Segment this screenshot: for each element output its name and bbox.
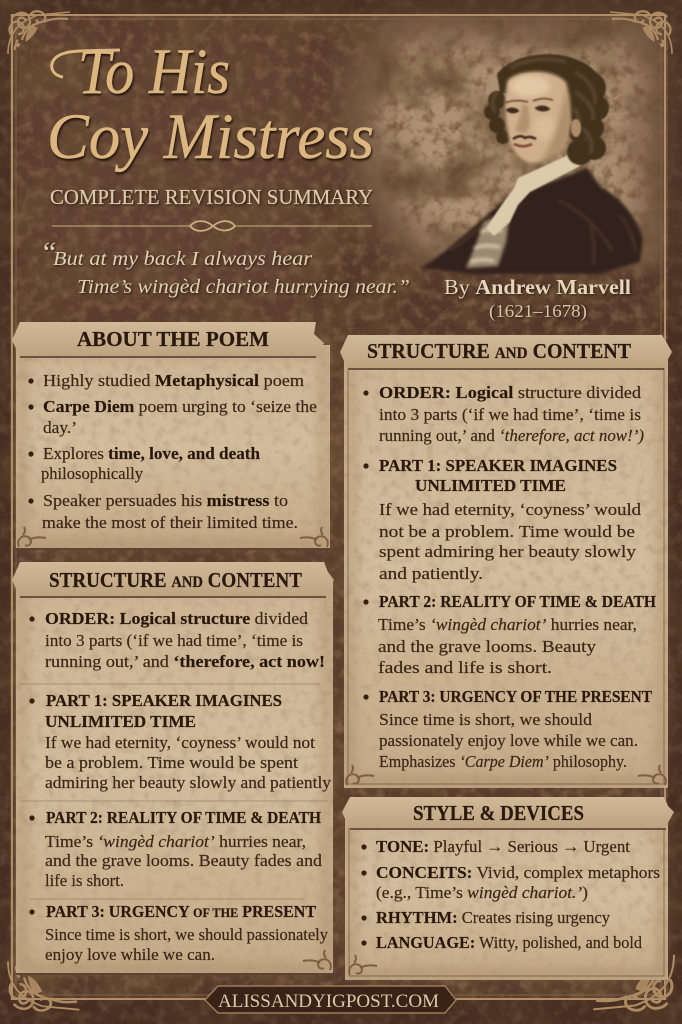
about list: Speaker persuades his mistress to xyxy=(43,491,288,510)
part 1: PART 1: SPEAKER IMAGINES xyxy=(46,691,282,710)
banner xyxy=(12,562,334,598)
style list: RHYTHM: Creates rising urgency xyxy=(376,908,610,927)
quote: But at my back I always hear xyxy=(53,248,312,270)
banner xyxy=(342,797,674,830)
dividers xyxy=(20,684,328,899)
order: into 3 parts (‘if we had time’, ‘time is xyxy=(45,631,303,650)
style list: (e.g., Time’s wingèd chariot.’) xyxy=(376,883,588,902)
order xyxy=(379,383,644,445)
about list: philosophically xyxy=(41,464,143,483)
part 1: not be a problem. Time would be xyxy=(379,522,635,541)
heading: STRUCTURE AND CONTENT xyxy=(367,339,631,363)
style list: LANGUAGE: Witty, polished, and bold xyxy=(376,933,642,952)
bullets xyxy=(361,844,367,946)
part 3: enjoy love while we can. xyxy=(45,945,215,964)
part 3 xyxy=(379,687,653,771)
part 1: PART 1: SPEAKER IMAGINES xyxy=(379,456,617,475)
part 1: and patiently. xyxy=(379,564,483,583)
panel: structure and content (left) xyxy=(12,562,334,975)
author credit: (1621–1678) xyxy=(489,301,587,322)
part 1 xyxy=(45,691,332,792)
part 1 xyxy=(379,456,642,583)
part 2: PART 2: REALITY OF TIME & DEATH xyxy=(379,592,656,611)
part 3: Since time is short, we should xyxy=(379,710,593,729)
part 1: UNLIMITED TIME xyxy=(45,712,196,731)
about list xyxy=(41,371,317,532)
part 2 xyxy=(378,592,656,677)
about list: Explores time, love, and death xyxy=(43,444,261,463)
author credit xyxy=(444,275,631,322)
order xyxy=(45,609,325,671)
subtitle: COMPLETE REVISION SUMMARY xyxy=(50,185,373,209)
heading: STYLE & DEVICES xyxy=(413,801,584,825)
style list: TONE: Playful → Serious → Urgent xyxy=(376,837,630,856)
style list xyxy=(376,837,660,952)
style list: CONCEITS: Vivid, complex metaphors xyxy=(376,863,660,882)
part 1: be a problem. Time would be spent xyxy=(45,753,298,772)
quote xyxy=(40,236,410,298)
coat xyxy=(421,168,643,274)
part 3: PART 3: URGENCY OF THE PRESENT xyxy=(379,687,653,706)
part 1: If we had eternity, ‘coyness’ would not xyxy=(45,733,315,752)
order: ORDER: Logical structure divided xyxy=(45,609,309,628)
title xyxy=(47,36,374,173)
banner xyxy=(12,322,324,358)
ear xyxy=(571,119,581,137)
part 2: fades and life is short. xyxy=(378,658,552,677)
part 3: PART 3: URGENCY OF THE PRESENT xyxy=(46,902,317,921)
part 1: spent admiring her beauty slowly xyxy=(379,542,637,561)
order: into 3 parts (‘if we had time’, ‘time is xyxy=(379,405,641,424)
cravat xyxy=(486,152,580,236)
part 2: Time’s ‘wingèd chariot’ hurries near, xyxy=(378,615,637,634)
order: running out,’ and ‘therefore, act now! xyxy=(45,652,325,671)
part 2: and the grave looms. Beauty fades and xyxy=(45,851,323,870)
about list: day.’ xyxy=(43,418,77,437)
part 3: Emphasizes ‘Carpe Diem’ philosophy. xyxy=(379,752,627,771)
part 2: PART 2: REALITY OF TIME & DEATH xyxy=(46,808,321,827)
author credit: By Andrew Marvell xyxy=(444,275,631,299)
bullets xyxy=(29,616,35,915)
title: Coy Mistress xyxy=(47,101,374,173)
lace ruffle xyxy=(466,212,510,268)
heading: ABOUT THE POEM xyxy=(77,327,269,351)
about list: make the most of their limited time. xyxy=(42,513,298,532)
part 1: admiring her beauty slowly and patiently xyxy=(45,773,332,792)
footer website badge: ALISSANDYIGPOST.COM xyxy=(218,991,439,1012)
panel: about the poem xyxy=(12,322,330,550)
part 2: Time’s ‘wingèd chariot’ hurries near, xyxy=(45,832,306,851)
part 1: If we had eternity, ‘coyness’ would xyxy=(379,500,642,519)
footer website badge xyxy=(205,986,456,1013)
face xyxy=(505,72,570,163)
panel: style and devices xyxy=(342,797,674,980)
hair xyxy=(484,54,609,165)
facial features xyxy=(505,99,553,146)
order: ORDER: Logical structure divided xyxy=(379,383,642,402)
portrait of Andrew Marvell xyxy=(421,54,643,274)
order: running out,’ and ‘therefore, act now!’) xyxy=(379,426,644,445)
bullets xyxy=(28,378,34,504)
bullets xyxy=(363,390,369,700)
about list: Carpe Diem poem urging to ‘seize the xyxy=(43,397,317,416)
about list: Highly studied Metaphysical poem xyxy=(43,371,304,390)
part 3 xyxy=(45,902,328,964)
quote: Time’s wingèd chariot hurrying near.” xyxy=(77,276,410,298)
part 3: Since time is short, we should passionately xyxy=(45,925,328,944)
part 2: and the grave looms. Beauty xyxy=(378,637,597,656)
part 2 xyxy=(45,808,323,890)
banner xyxy=(340,335,672,370)
title: To His xyxy=(78,36,230,108)
heading: STRUCTURE AND CONTENT xyxy=(49,568,302,592)
part 2: life is short. xyxy=(45,871,124,890)
part 1: UNLIMITED TIME xyxy=(415,476,566,495)
part 3: passionately enjoy love while we can. xyxy=(379,731,638,750)
quote: “ xyxy=(40,236,57,269)
flourish divider xyxy=(52,221,372,231)
panel: structure and content (right) xyxy=(340,335,672,788)
